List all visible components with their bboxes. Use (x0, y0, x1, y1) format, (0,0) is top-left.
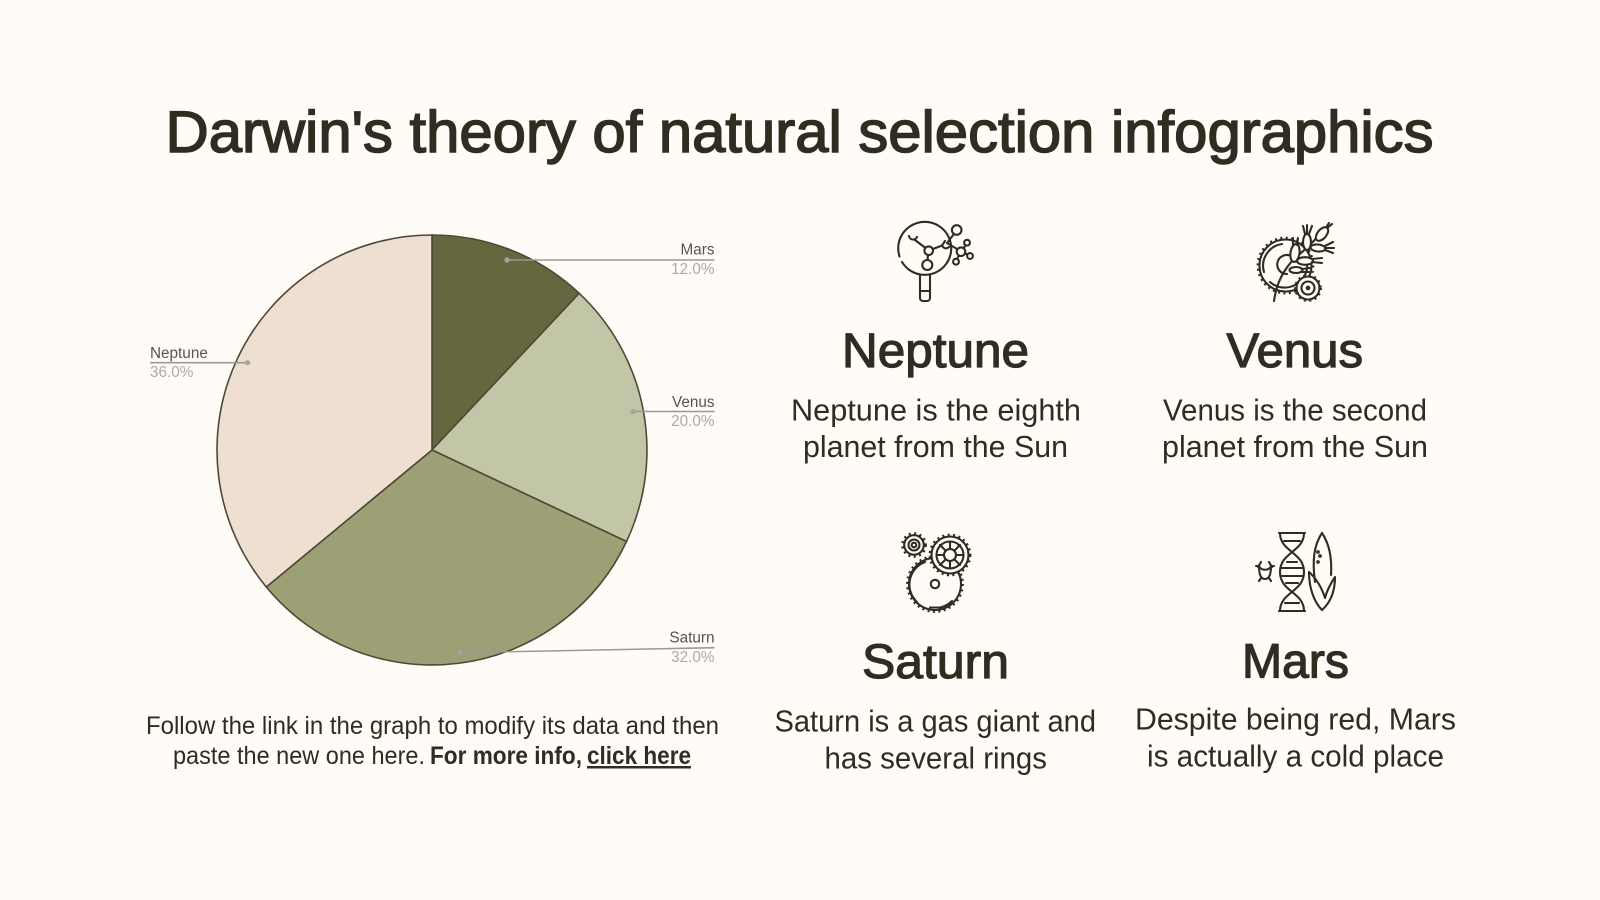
chart note text (146, 712, 719, 770)
label: Saturn: Saturn (669, 630, 714, 646)
heading: Venus: Venus (1226, 325, 1363, 378)
description: Mars (1135, 702, 1456, 774)
description: Saturn: Saturn is a gas giant and (774, 704, 1096, 738)
description: Neptune (791, 392, 1081, 464)
slice: Neptune 36% (217, 235, 432, 587)
description: Mars: Despite being red, Mars (1135, 702, 1456, 736)
label: Mars (504, 242, 715, 278)
description: Venus: planet from the Sun (1162, 429, 1428, 464)
label: Venus: 20.0% (671, 413, 715, 430)
description: Neptune: planet from the Sun (803, 429, 1068, 464)
icon: magnifying glass with molecule (898, 222, 973, 301)
label: Mars: Mars (680, 242, 715, 258)
label: Neptune: 36.0% (150, 364, 194, 381)
panel: Saturn (774, 534, 1096, 776)
description: Saturn (774, 704, 1096, 776)
label: Venus (630, 394, 715, 430)
chart note text: paste the new one here. (173, 742, 425, 770)
description: Neptune: Neptune is the eighth (791, 392, 1081, 428)
description: Saturn: has several rings (824, 740, 1047, 776)
slice: Saturn 32% (266, 450, 626, 665)
chart note text: For more info, (430, 742, 582, 770)
description: Venus (1162, 392, 1428, 464)
panel: Neptune (791, 222, 1081, 464)
pie chart (150, 235, 715, 666)
label: Venus: Venus (672, 394, 715, 411)
title: Darwin's theory of natural selection infographics (166, 100, 1434, 165)
description: Mars: is actually a cold place (1147, 738, 1444, 774)
heading: Mars: Mars (1242, 636, 1349, 688)
label: Neptune: Neptune (150, 345, 208, 362)
panel: Venus (1162, 223, 1428, 464)
slice: Venus 20% (432, 293, 647, 542)
description: Venus: Venus is the second (1163, 392, 1427, 428)
icon: plant over gears (1258, 223, 1334, 301)
label: Neptune (150, 345, 250, 381)
panel: Mars (1135, 533, 1456, 774)
icon: DNA, beetle and corn (1256, 533, 1335, 611)
heading: Neptune: Neptune (842, 325, 1029, 378)
chart note text: click here (587, 742, 691, 770)
chart note text: Follow the link in the graph to modify its data and then (146, 712, 719, 740)
label: Saturn: 32.0% (671, 649, 715, 666)
slice: Mars 12% (432, 235, 579, 450)
label: Mars: 12.0% (671, 261, 715, 278)
icon: three gears (902, 534, 970, 612)
label: Saturn (458, 630, 715, 666)
heading: Saturn: Saturn (862, 636, 1009, 689)
